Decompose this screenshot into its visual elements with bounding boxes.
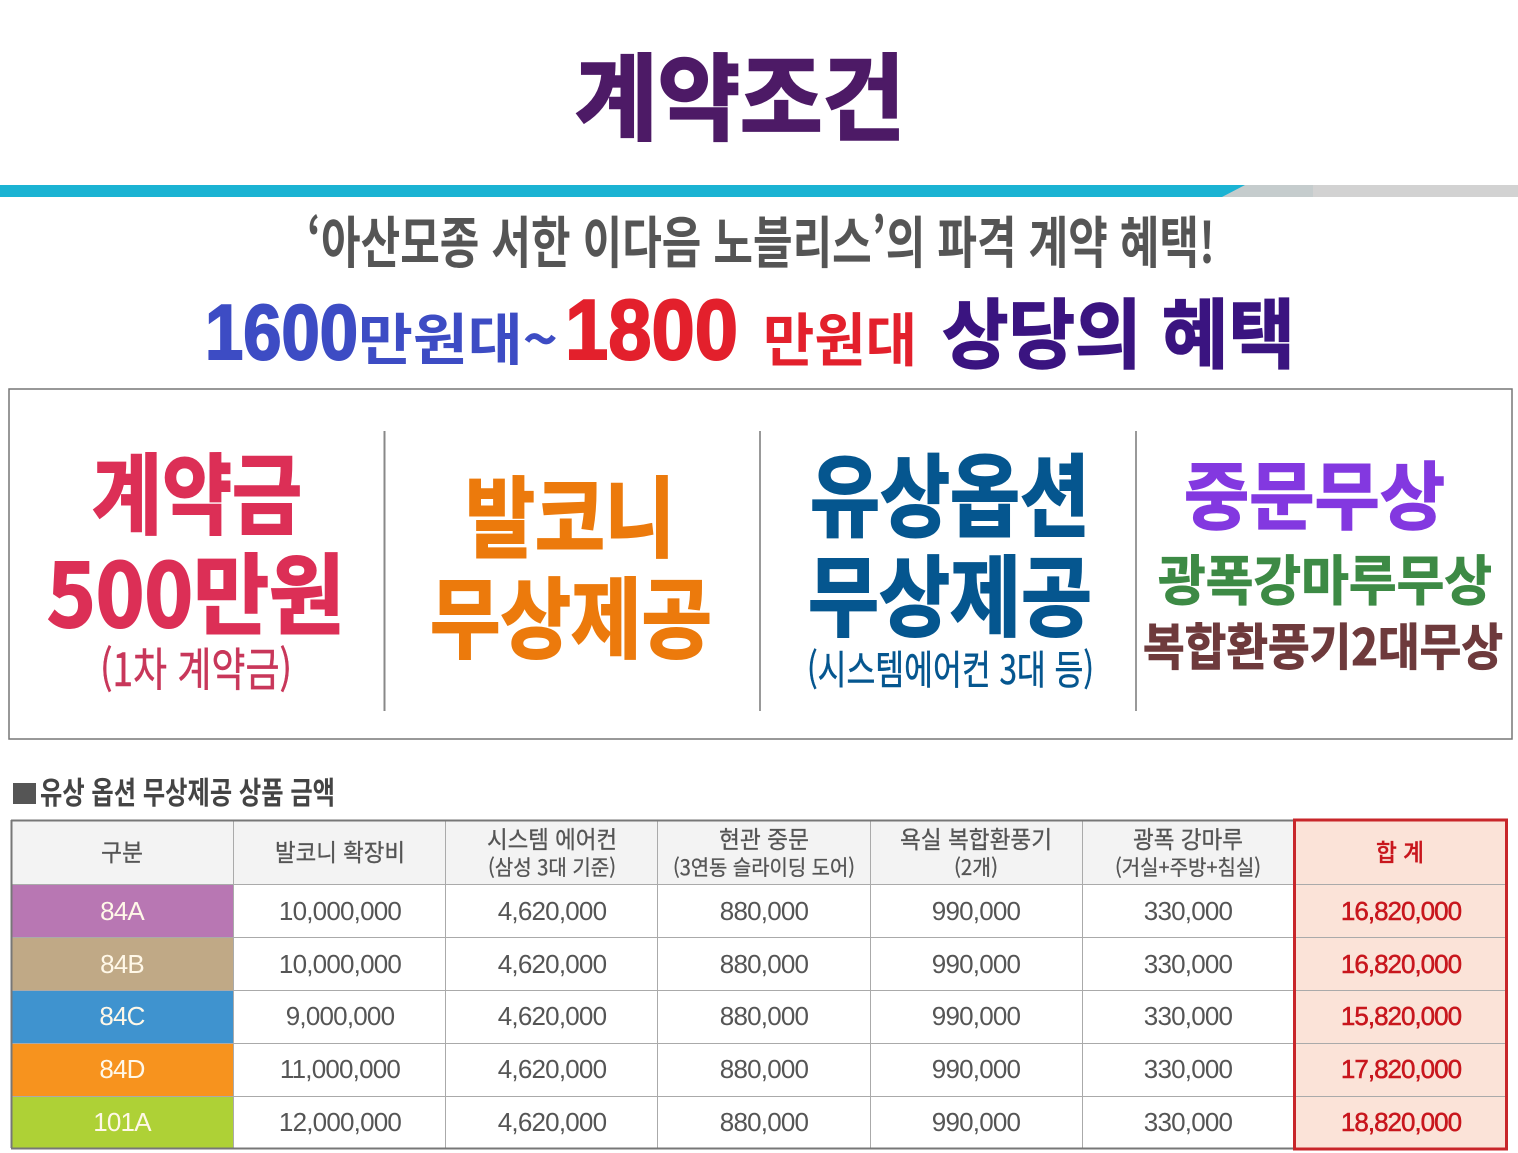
panel: contract benefits <box>9 389 1512 739</box>
row 84A: 16,820,000 <box>1341 896 1462 926</box>
row 84B <box>100 949 1462 979</box>
row 84B: 330,000 <box>1144 949 1233 979</box>
balcony heading: 발코니 <box>465 449 675 576</box>
benefit phrase: 상당의 혜택 <box>942 274 1295 384</box>
table header: 시스템 에어컨 <box>487 820 617 855</box>
header band <box>0 185 1518 197</box>
row 84A: 4,620,000 <box>498 896 607 926</box>
balcony benefit <box>430 449 712 677</box>
row 101A: 4,620,000 <box>498 1107 607 1137</box>
row 84B: 990,000 <box>932 949 1021 979</box>
row 101A: 12,000,000 <box>279 1107 401 1137</box>
row 84A: 330,000 <box>1144 896 1233 926</box>
row 84C: 84C <box>99 1001 145 1031</box>
row 101A: 880,000 <box>720 1107 809 1137</box>
price to unit: 만원대 <box>763 294 917 378</box>
row 84A: 880,000 <box>720 896 809 926</box>
table header: 현관 중문 <box>719 820 809 855</box>
table header: 합 계 <box>1376 833 1424 868</box>
table header: 구분 <box>101 833 143 868</box>
subtitle: ‘아산모종 서한 이다음 노블리스’의 파격 계약 혜택! <box>307 199 1215 280</box>
section heading: 유상 옵션 무상제공 상품 금액 <box>40 768 335 813</box>
row 84D: 11,000,000 <box>280 1054 400 1084</box>
row 101A: 101A <box>93 1107 152 1137</box>
row 101A <box>93 1107 1462 1137</box>
option free: 무상제공 <box>808 528 1092 655</box>
price to: 1800 <box>565 283 738 378</box>
row 101A: 18,820,000 <box>1341 1107 1462 1137</box>
row 84A <box>100 896 1462 926</box>
deposit note: (1차 계약금) <box>100 634 292 700</box>
row 84D: 17,820,000 <box>1341 1054 1462 1084</box>
title: 계약조건 <box>575 24 905 160</box>
price from unit: 만원대~ <box>358 296 558 377</box>
floor free: 광폭강마루무상 <box>1158 537 1492 616</box>
option heading: 유상옵션 <box>810 425 1090 555</box>
table header: (2개) <box>954 852 998 882</box>
deposit heading: 계약금 <box>92 426 302 553</box>
row 84D: 84D <box>99 1054 145 1084</box>
row 101A: 990,000 <box>932 1107 1021 1137</box>
row 84C: 880,000 <box>720 1001 809 1031</box>
row 84D: 330,000 <box>1144 1054 1233 1084</box>
door free: 중문무상 <box>1184 438 1445 545</box>
free items benefit <box>1143 438 1503 680</box>
row 84A: 10,000,000 <box>279 896 401 926</box>
table header: (3연동 슬라이딩 도어) <box>673 852 855 882</box>
row 84B: 880,000 <box>720 949 809 979</box>
row 84C: 4,620,000 <box>498 1001 607 1031</box>
table header: (삼성 3대 기준) <box>488 852 616 882</box>
row 84C <box>99 1001 1462 1031</box>
row 84C: 330,000 <box>1144 1001 1233 1031</box>
row 84C: 9,000,000 <box>286 1001 395 1031</box>
option note: (시스템에어컨 3대 등) <box>807 638 1094 696</box>
row 84D <box>99 1054 1462 1084</box>
row 84D: 880,000 <box>720 1054 809 1084</box>
row 84C: 15,820,000 <box>1341 1001 1462 1031</box>
benefit headline <box>205 274 1295 384</box>
table header: 욕실 복합환풍기 <box>900 820 1052 855</box>
row 84B: 16,820,000 <box>1341 949 1462 979</box>
price from: 1600 <box>205 288 358 376</box>
price table <box>11 820 1507 1149</box>
paid option benefit <box>807 425 1094 696</box>
row 84B: 4,620,000 <box>498 949 607 979</box>
balcony free: 무상제공 <box>430 550 712 677</box>
row 84C: 990,000 <box>932 1001 1021 1031</box>
row 84D: 4,620,000 <box>498 1054 607 1084</box>
row 84A: 84A <box>100 896 145 926</box>
row 84B: 10,000,000 <box>279 949 401 979</box>
deposit amount: 500만원 <box>47 526 345 653</box>
table header <box>101 820 1424 882</box>
table header: (거실+주방+침실) <box>1115 852 1261 882</box>
row 101A: 330,000 <box>1144 1107 1233 1137</box>
row 84A: 990,000 <box>932 896 1021 926</box>
row 84B: 84B <box>100 949 144 979</box>
table header: 광폭 강마루 <box>1133 820 1243 855</box>
deposit benefit <box>47 426 345 700</box>
row 84D: 990,000 <box>932 1054 1021 1084</box>
table header: 발코니 확장비 <box>275 833 405 868</box>
